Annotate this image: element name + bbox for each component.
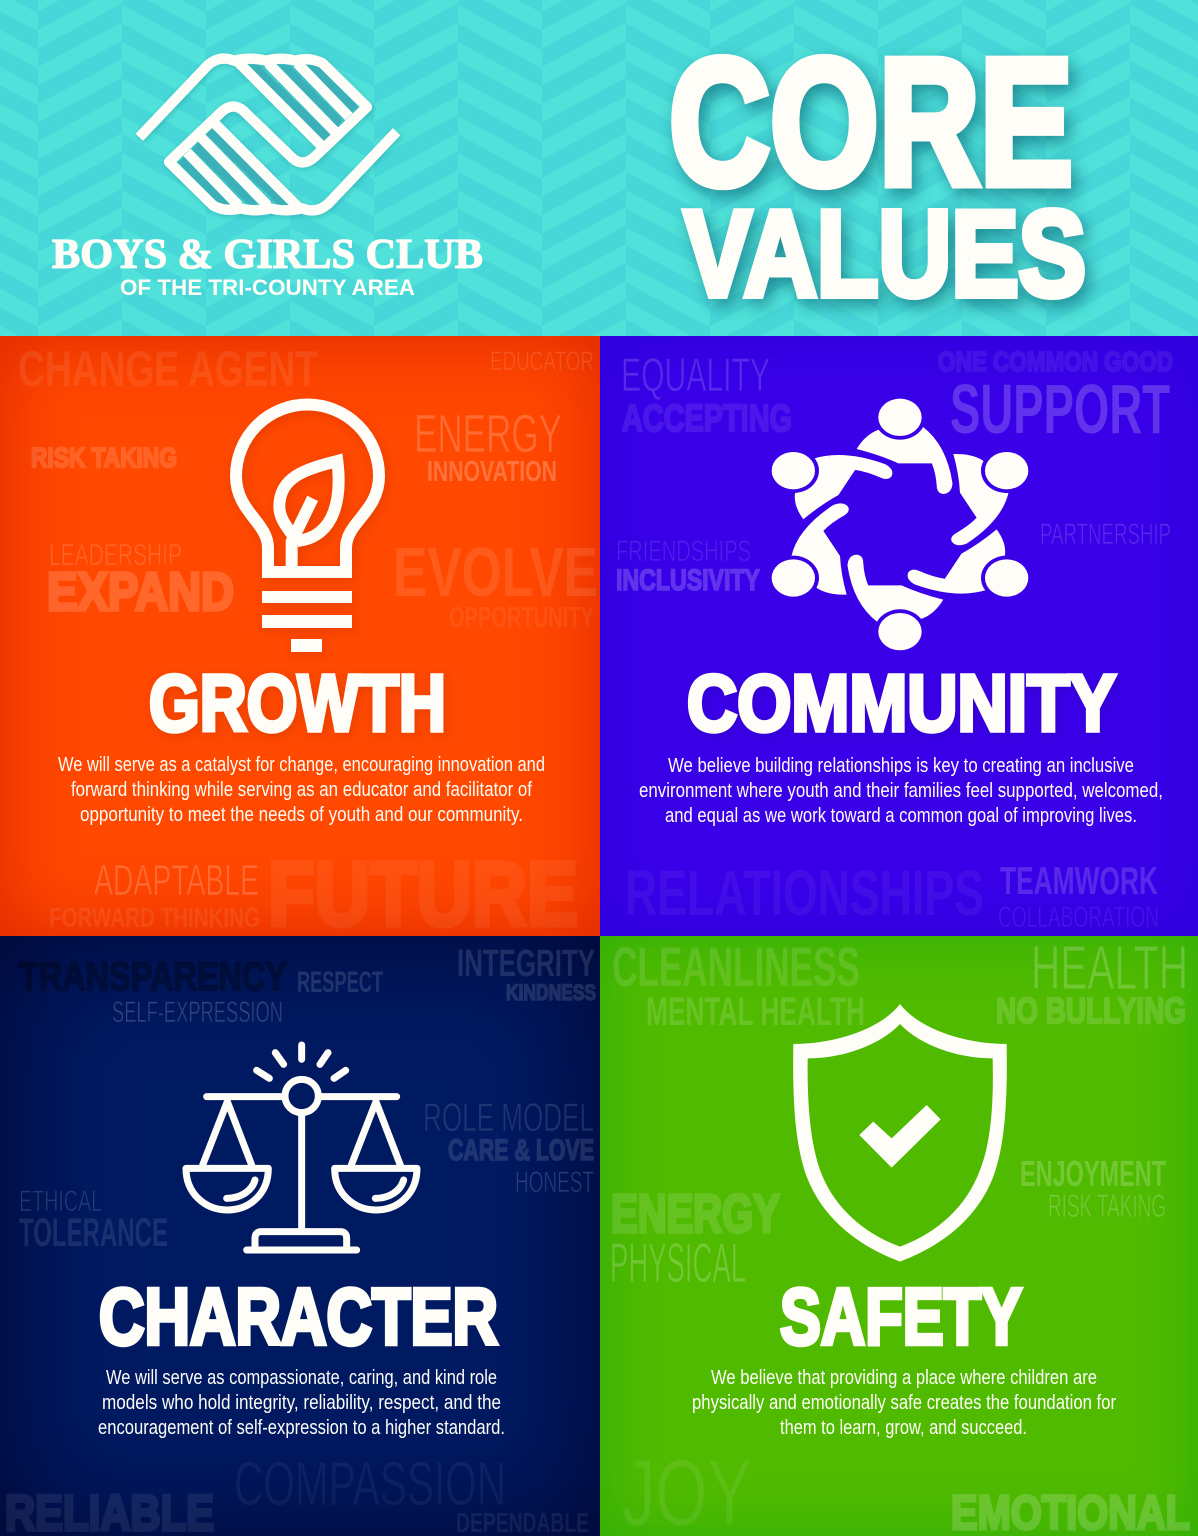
- background words: growth: [18, 341, 598, 945]
- heading: growth: GROWTH: [149, 658, 446, 748]
- background words: character: ETHICAL: [19, 1185, 102, 1218]
- background words: community: EQUALITY: [621, 348, 770, 401]
- logo subtitle: OF THE TRI-COUNTY AREA: [120, 275, 415, 300]
- text: growth description: [58, 754, 545, 826]
- icon: shield with check mark: [793, 1004, 1007, 1262]
- text: safety description: [692, 1367, 1116, 1439]
- text: safety description: them to learn, grow, and succeed.: [780, 1417, 1027, 1439]
- background words: safety: PHYSICAL: [610, 1231, 746, 1294]
- background words: character: [5, 943, 596, 1536]
- background words: community: ACCEPTING: [622, 398, 792, 440]
- background words: safety: MENTAL HEALTH: [646, 990, 865, 1034]
- background words: safety: ENERGY: [611, 1184, 780, 1244]
- background words: growth: FORWARD THINKING: [49, 902, 260, 933]
- text: character description: We will serve as compassionate, caring, and kind role: [106, 1367, 497, 1389]
- logo: boys and girls club: [52, 59, 483, 300]
- main title: CORE: [669, 22, 1073, 223]
- background words: character: SELF-EXPRESSION: [112, 996, 283, 1029]
- background words: character: TOLERANCE: [19, 1211, 168, 1255]
- main title: VALUES: [684, 186, 1086, 322]
- panel: header: [0, 0, 1198, 336]
- text: safety description: We believe that providing a place where children are: [711, 1367, 1097, 1389]
- panel: character: [0, 936, 600, 1536]
- background words: growth: ADAPTABLE: [94, 856, 259, 905]
- heading: community: COMMUNITY: [687, 658, 1116, 748]
- background words: character: RESPECT: [297, 966, 383, 999]
- panel: growth: [0, 336, 600, 936]
- logo name: BOYS & GIRLS CLUB: [52, 232, 483, 278]
- text: growth description: opportunity to meet the needs of youth and our community.: [80, 804, 523, 826]
- background words: growth: LEADERSHIP: [49, 537, 182, 572]
- background words: community: RELATIONSHIPS: [625, 857, 984, 929]
- background words: growth: INNOVATION: [427, 456, 557, 488]
- panel: community: [600, 336, 1198, 936]
- background words: safety: [610, 934, 1190, 1536]
- background words: growth: EXPAND: [47, 562, 234, 622]
- text: character description: encouragement of self-expression to a higher standard.: [98, 1417, 505, 1439]
- panel: safety: [600, 936, 1198, 1536]
- main title: [669, 22, 1086, 322]
- background words: community: FRIENDSHIPS: [616, 535, 751, 568]
- background words: safety: CLEANLINESS: [612, 936, 860, 998]
- text: community description: [639, 755, 1163, 827]
- background words: growth: RISK TAKING: [31, 442, 177, 473]
- icon: light bulb with leaf: [236, 404, 379, 652]
- background words: character: TRANSPARENCY: [19, 955, 287, 999]
- heading: character: CHARACTER: [99, 1272, 498, 1361]
- icon: balance scale: [186, 1045, 417, 1250]
- background words: community: [616, 346, 1173, 934]
- background words: community: INCLUSIVITY: [616, 564, 760, 597]
- heading: safety: SAFETY: [780, 1272, 1022, 1361]
- background words: growth: CHANGE AGENT: [18, 341, 318, 397]
- text: character description: models who hold integrity, reliability, respect, and the: [102, 1392, 501, 1414]
- text: safety description: physically and emotionally safe creates the foundation for: [692, 1392, 1116, 1414]
- icon: handshake: [139, 59, 397, 210]
- icon: six people in a circle: [768, 395, 1032, 654]
- text: character description: [98, 1367, 505, 1439]
